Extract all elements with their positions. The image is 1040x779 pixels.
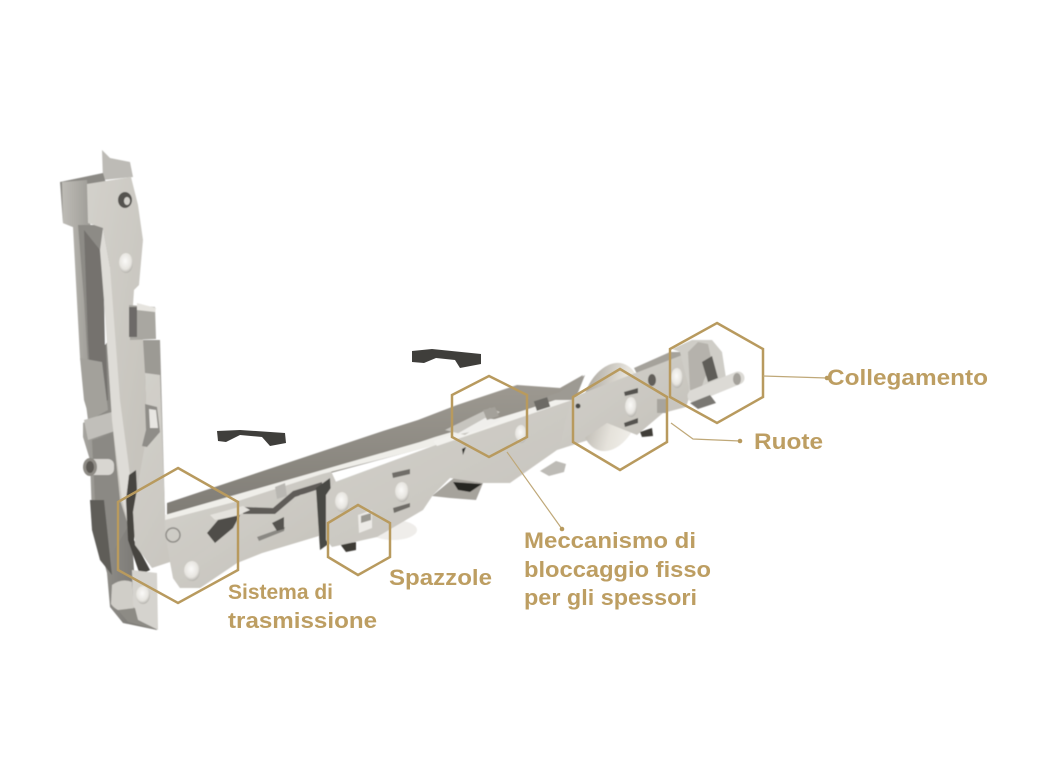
vertical arm: dark roller behind — [90, 500, 112, 575]
vertical arm: clip — [129, 303, 156, 340]
transmission link — [173, 490, 322, 588]
center dark spacer — [316, 478, 334, 550]
label: collegamento: Collegamento — [827, 365, 988, 390]
horizontal arm: dark strip shadow — [243, 482, 322, 514]
label: sistema di trasmissione: trasmissione — [228, 608, 377, 633]
leader line: meccanismo — [507, 452, 564, 531]
horizontal arm: top band — [167, 375, 583, 517]
label: ruote: Ruote — [754, 429, 823, 454]
main plate — [326, 395, 620, 547]
rear wheel — [571, 356, 651, 458]
label: sistema di trasmissione — [228, 581, 377, 633]
lower wheel small — [369, 520, 417, 540]
hexagon: spazzole — [328, 505, 390, 575]
connector hardware — [672, 340, 741, 409]
link slots — [257, 483, 287, 541]
icon: cylinder stud — [83, 458, 114, 476]
leader line: collegamento — [763, 376, 829, 380]
small foot — [540, 461, 566, 476]
central wheel — [432, 478, 483, 500]
hexagon: sistema di trasmissione — [118, 468, 238, 603]
vertical arm: back rail — [60, 150, 157, 630]
hardware: product illustration — [60, 150, 741, 630]
label: sistema di trasmissione: Sistema di — [228, 581, 333, 604]
vertical arm: gray fill behind strip — [126, 340, 165, 515]
corner plate — [133, 373, 240, 568]
label: spazzole: Spazzole — [389, 565, 492, 590]
vertical arm: dark inner gap — [126, 470, 150, 575]
hexagon: collegamento — [670, 323, 763, 423]
label: meccanismo di bloccaggio: Meccanismo di — [524, 528, 696, 553]
vertical arm: front strip — [87, 177, 147, 540]
bottom plate and roller — [111, 570, 158, 630]
leader line: ruote — [671, 423, 742, 443]
label: meccanismo di bloccaggio: bloccaggio fisso — [524, 557, 711, 582]
rear wheel top band — [634, 352, 688, 380]
clip: left dark spacer — [217, 430, 286, 446]
right plate — [560, 354, 690, 445]
right plate slots — [576, 374, 667, 437]
horizontal arm: front strip — [165, 469, 336, 588]
brush stub — [340, 542, 356, 552]
mechanism detail — [445, 375, 585, 455]
hexagon: ruote — [573, 369, 667, 470]
clip: right dark spacer — [412, 349, 481, 368]
hexagon: meccanismo — [452, 376, 527, 457]
rivets and holes — [118, 192, 683, 604]
label: meccanismo di bloccaggio: per gli spessori — [524, 585, 697, 610]
label: meccanismo di bloccaggio — [524, 528, 711, 610]
